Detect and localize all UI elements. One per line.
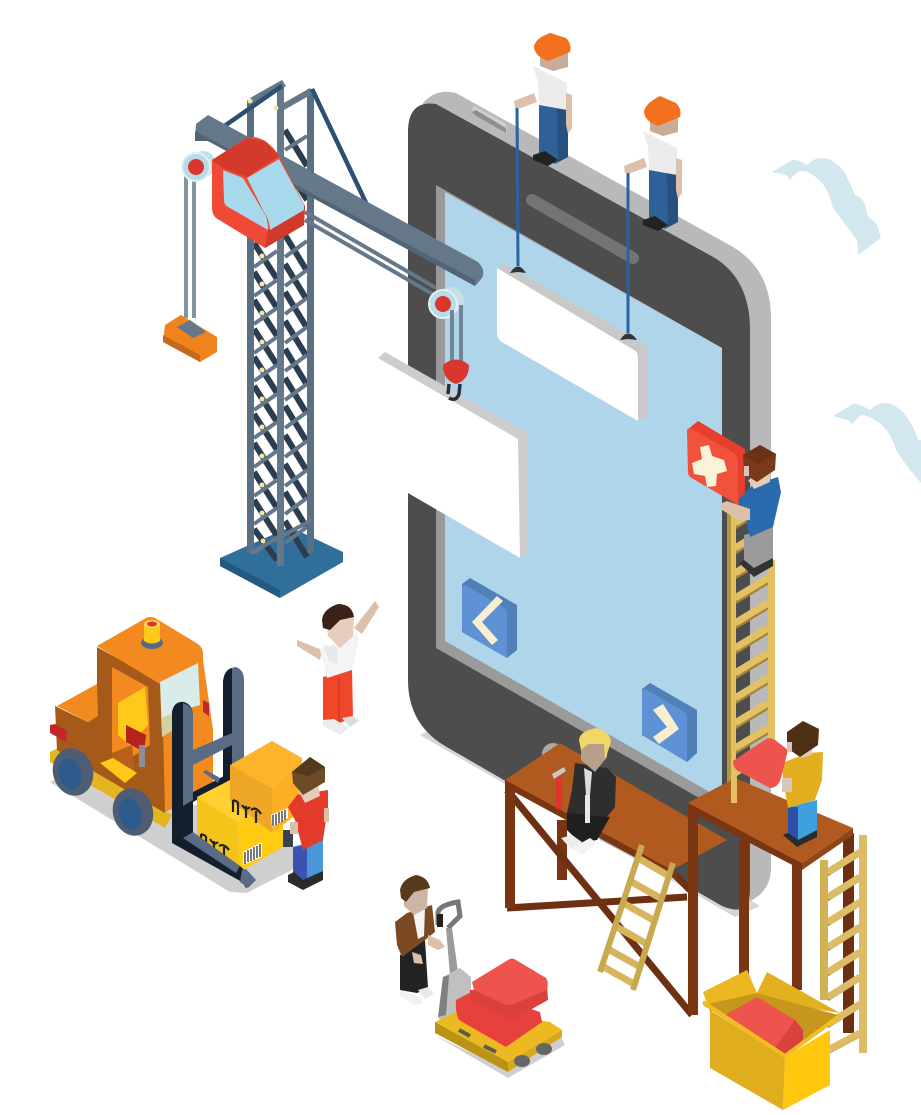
- phone shadow: [420, 725, 760, 917]
- cab roof: [97, 617, 203, 684]
- lattice dark diagonals: [254, 130, 307, 560]
- boom: [195, 115, 483, 286]
- hand arm: [722, 501, 750, 521]
- hair: [743, 445, 776, 482]
- phone: [408, 92, 771, 917]
- counterweight: [163, 315, 217, 362]
- worker in red shirt: [283, 757, 329, 890]
- home button: [542, 743, 564, 765]
- white shoes: [561, 835, 582, 850]
- tower legs: [247, 100, 254, 552]
- forklift shadow: [50, 770, 300, 893]
- mast stub: [203, 770, 220, 783]
- shoes: [643, 216, 668, 231]
- fragile marks: [201, 834, 229, 860]
- arms: [297, 640, 322, 660]
- phone face: [408, 104, 750, 910]
- wrench: [585, 795, 590, 823]
- cabin: [212, 137, 305, 248]
- window: [160, 663, 200, 737]
- neck: [795, 748, 812, 758]
- shoes: [739, 558, 773, 577]
- forklift: [47, 617, 302, 893]
- arms: [514, 93, 537, 108]
- red block: [733, 738, 788, 788]
- upper box: [230, 741, 302, 833]
- flap rims: [703, 1002, 838, 1056]
- shirt: [533, 66, 567, 110]
- left pulley: [182, 151, 216, 181]
- shirt: [782, 752, 823, 808]
- worker with helmet and rope, right: [620, 96, 682, 340]
- neck: [748, 473, 770, 489]
- box right face: [783, 1030, 830, 1110]
- lower red block: [456, 990, 542, 1047]
- icon: red cross button: [687, 421, 745, 505]
- speaker slit: [532, 200, 633, 258]
- jacket: [395, 905, 435, 957]
- seat: [118, 687, 148, 745]
- hand arm: [428, 935, 445, 950]
- ladder main: [727, 503, 775, 803]
- trousers: [400, 940, 428, 993]
- blond hair: [579, 728, 611, 760]
- ear: [787, 742, 792, 752]
- worker on phone ladder holding icon: [687, 421, 781, 803]
- shirt: [643, 131, 677, 175]
- table two front leg: [688, 807, 698, 1015]
- wheels: [514, 1055, 530, 1067]
- shoes: [323, 719, 349, 735]
- shoes: [533, 151, 558, 166]
- rope: [626, 170, 630, 333]
- rear wheel: [47, 744, 99, 800]
- hands: [782, 778, 792, 792]
- head: [326, 616, 354, 648]
- hammer: [552, 767, 566, 809]
- crane: [163, 80, 483, 598]
- head: [404, 886, 428, 915]
- cardboard box: [703, 970, 840, 1110]
- ear: [744, 466, 749, 476]
- rope clip: [620, 334, 637, 340]
- mast face: [183, 703, 193, 806]
- tail light: [50, 724, 67, 742]
- top button: [472, 106, 507, 133]
- lattice light diagonals: [254, 136, 307, 553]
- cross braces: [507, 790, 692, 1015]
- jacket: [567, 763, 616, 817]
- hook: [448, 384, 460, 399]
- phone side edge: [408, 92, 771, 910]
- rope: [517, 105, 518, 266]
- back ties: [305, 212, 436, 296]
- crane base: [220, 527, 343, 598]
- box inside: [703, 993, 838, 1057]
- worker with pallet jack: [395, 875, 565, 1078]
- rear mast upright: [223, 667, 244, 795]
- back leg: [557, 820, 567, 880]
- left flap: [703, 970, 757, 1012]
- fork tip: [240, 869, 256, 888]
- table two top: [688, 778, 853, 863]
- table one legs: [505, 783, 515, 908]
- main ladder foot: [731, 770, 737, 803]
- pallet jack handle: [438, 902, 460, 928]
- cloud: upper right: [772, 158, 881, 255]
- red contents: [725, 997, 803, 1048]
- hair: [322, 604, 354, 630]
- front mast and fork: [172, 702, 255, 888]
- shoes: [400, 990, 422, 1005]
- legs: [539, 104, 568, 164]
- equipment behind worker: [283, 830, 293, 847]
- screen frame: [436, 185, 722, 811]
- seated blond worker: [552, 728, 616, 855]
- shirt: [738, 477, 781, 537]
- jack body: [438, 968, 471, 1020]
- hair: [787, 721, 819, 757]
- icon: left arrow button: [462, 578, 517, 658]
- screen: [445, 192, 722, 799]
- table one top: [505, 743, 727, 870]
- cab front: [160, 660, 213, 813]
- beacon: [141, 620, 163, 649]
- tie: [584, 768, 592, 795]
- head: [540, 52, 568, 71]
- right pulley: [429, 287, 464, 318]
- legs: [649, 169, 678, 229]
- box left face: [710, 1010, 785, 1110]
- hair: [400, 875, 430, 902]
- shoes: [783, 830, 817, 847]
- left cable: [186, 170, 194, 318]
- cab side: [55, 647, 165, 813]
- neck: [298, 785, 320, 803]
- standing ladder: [820, 835, 867, 1053]
- rope clip: [510, 266, 526, 273]
- icon: right arrow button: [642, 683, 697, 762]
- shirt: [288, 790, 328, 850]
- pallet slots: [459, 1030, 496, 1052]
- hook block: [443, 360, 469, 384]
- tie rods: [223, 86, 368, 207]
- upper panel being lowered: [497, 262, 648, 421]
- scaffold tables: [505, 743, 854, 1033]
- pallet shadow: [436, 1035, 565, 1078]
- upper red block: [470, 985, 548, 1020]
- arms: [624, 158, 647, 173]
- hook cable: [452, 305, 461, 362]
- waving worker: [297, 601, 379, 735]
- step: [100, 758, 137, 783]
- shirt: [320, 632, 359, 678]
- hand: [290, 822, 298, 834]
- table two back leg: [739, 840, 749, 975]
- trousers: [788, 800, 817, 843]
- left panel cut-out: [378, 352, 528, 558]
- shirt: [413, 908, 425, 939]
- mast cross bars: [193, 733, 232, 765]
- pallet: [435, 1009, 562, 1062]
- leaning ladder: [600, 845, 673, 990]
- steering: [126, 725, 146, 752]
- front wheel: [107, 784, 159, 840]
- head: [650, 117, 678, 136]
- tower rivets: [250, 101, 276, 541]
- pants: [744, 527, 773, 570]
- worker in yellow shirt with red block: [731, 721, 823, 847]
- jeans: [293, 838, 323, 882]
- chassis rail: [50, 748, 172, 828]
- shoes: [288, 871, 323, 890]
- head: [581, 734, 608, 772]
- rear hood: [57, 684, 98, 722]
- worker with helmet and rope, left: [510, 33, 572, 273]
- helmet: [534, 33, 570, 61]
- lower box: [197, 780, 283, 872]
- helmet: [644, 96, 680, 126]
- mirror light: [203, 700, 209, 716]
- hair: [292, 757, 325, 795]
- red trousers: [323, 669, 353, 723]
- door floor: [112, 745, 135, 775]
- table two far leg: [843, 833, 854, 1033]
- right flap: [757, 972, 840, 1013]
- barcode: [243, 842, 262, 865]
- door opening: [112, 667, 150, 757]
- legs: [567, 812, 610, 843]
- cloud: right edge: [833, 403, 921, 483]
